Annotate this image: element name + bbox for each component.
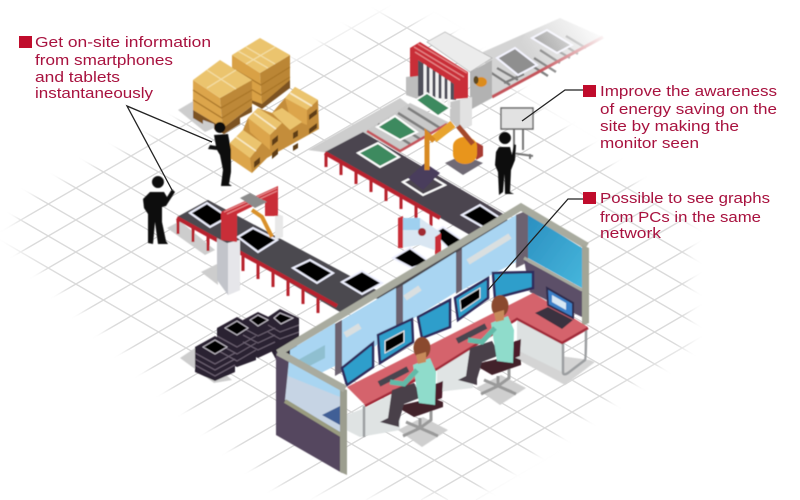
back wall windows bbox=[290, 215, 516, 388]
leader lines: on-site information bbox=[127, 106, 212, 190]
callout: graphs from PCs: from PCs in the same bbox=[600, 209, 761, 226]
orange sensor bbox=[474, 76, 487, 87]
lower purple wall bbox=[524, 260, 584, 318]
monitor stand bbox=[501, 108, 533, 159]
upper conveyor bbox=[483, 0, 620, 97]
laptop bbox=[535, 288, 573, 329]
leader line: graphs from PCs bbox=[488, 199, 583, 290]
front partition panel bbox=[276, 352, 342, 473]
callout: on-site information: instantaneously bbox=[35, 85, 153, 102]
back pallet stack bbox=[232, 38, 290, 109]
callout: energy saving: Improve the awareness bbox=[600, 83, 777, 100]
control room cubicle bbox=[276, 207, 595, 475]
silhouette: person at monitor bbox=[495, 132, 516, 195]
callout: on-site information bbox=[19, 34, 211, 102]
loose box cluster bbox=[230, 87, 319, 173]
lower conveyor with trays bbox=[177, 200, 520, 313]
black trays bbox=[190, 203, 500, 294]
rear operator bbox=[458, 295, 526, 405]
factory artwork bbox=[143, 0, 620, 475]
desk legs bbox=[563, 330, 586, 374]
callout: energy saving: site by making the bbox=[600, 118, 739, 135]
desk top bbox=[347, 293, 588, 405]
top beam bbox=[278, 207, 587, 353]
front partition window bbox=[285, 360, 340, 432]
front operator bbox=[380, 337, 448, 447]
gantry robot bbox=[217, 186, 283, 295]
silhouette: person with tablet bbox=[208, 122, 232, 186]
floor shadow under desk bbox=[500, 350, 595, 385]
callout: on-site information: from smartphones bbox=[35, 52, 173, 69]
callout: graphs from PCs bbox=[583, 190, 770, 242]
cardboard boxes on pallets bbox=[193, 38, 319, 173]
monitor graphs bbox=[385, 331, 404, 353]
callout: energy saving: of energy saving on the bbox=[600, 101, 777, 118]
keyboards bbox=[379, 326, 486, 384]
floor zones bbox=[167, 98, 416, 383]
monitors bbox=[342, 272, 533, 385]
callout: energy saving bbox=[583, 83, 777, 152]
window racks bbox=[345, 236, 510, 335]
small loading gantry bbox=[398, 216, 441, 255]
silhouette: person with smartphone bbox=[143, 176, 175, 244]
wall posts bbox=[335, 210, 528, 376]
callout: energy saving: monitor seen bbox=[600, 135, 699, 152]
robot arm bbox=[427, 124, 483, 175]
scanner gate bbox=[406, 32, 492, 131]
under-desk panels bbox=[346, 390, 400, 437]
corner teal panel bbox=[528, 214, 582, 288]
front pallet stack bbox=[193, 60, 252, 134]
corner post bbox=[340, 387, 347, 475]
callout: graphs from PCs: network bbox=[600, 225, 661, 242]
callout: on-site information: and tablets bbox=[35, 69, 120, 86]
dark conveyor upper bbox=[325, 132, 505, 235]
roller conveyor with circuit boards bbox=[367, 103, 450, 151]
black tray stacks bbox=[195, 309, 299, 381]
callout: graphs from PCs: Possible to see graphs bbox=[600, 190, 770, 207]
leader line: energy saving bbox=[522, 90, 583, 121]
callout: on-site information: Get on-site information bbox=[35, 34, 211, 51]
right post bbox=[582, 245, 589, 326]
